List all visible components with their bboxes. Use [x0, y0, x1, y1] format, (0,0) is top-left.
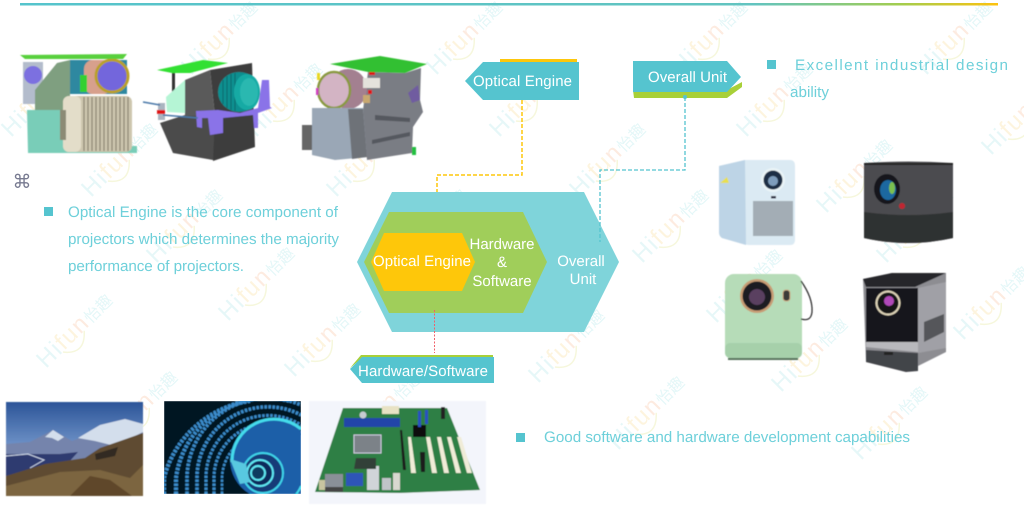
background watermark: Hifun怡趣 [213, 240, 300, 326]
background watermark: Hifun怡趣 [321, 116, 408, 202]
image: mountain landscape [6, 402, 143, 496]
bullet [767, 60, 776, 69]
background watermark: Hifun怡趣 [176, 0, 263, 80]
text block: industrial design: ability [790, 84, 829, 101]
background watermark: Hifun怡趣 [341, 364, 428, 450]
bullet [516, 433, 525, 442]
background watermark: Hifun怡趣 [456, 242, 543, 328]
image: optical engine 1 [20, 54, 137, 153]
background watermark: Hifun怡趣 [386, 182, 473, 268]
bullet [44, 207, 53, 216]
background watermark: Hifun怡趣 [279, 296, 366, 382]
background watermark: Hifun怡趣 [484, 56, 571, 142]
text block: industrial design: Excellent industrial design [795, 57, 1008, 74]
text block: industrial design [767, 57, 1008, 101]
background watermark: Hifun怡趣 [421, 0, 508, 80]
background watermark: Hifun怡趣 [76, 116, 163, 202]
image: optical engine 3 [302, 56, 427, 160]
background watermark: Hifun怡趣 [701, 242, 788, 328]
nested hexagon diagram: Software [472, 273, 532, 290]
label: hardware software [350, 355, 494, 383]
text block: optical engine description: performance of projectors. [68, 258, 244, 275]
label: optical engine: Optical Engine [473, 73, 572, 90]
top gradient bar [20, 3, 998, 6]
background watermark: Hifun怡趣 [871, 182, 958, 268]
image: optical engine 2 [143, 60, 272, 161]
label: hardware software: Hardware/Software [358, 363, 488, 380]
image: black cube projector [863, 273, 946, 372]
background watermark: Hifun怡趣 [666, 0, 753, 80]
hexagon: optical engine [371, 233, 475, 291]
background watermark: Hifun怡趣 [96, 364, 183, 450]
label: overall unit [633, 61, 742, 98]
text block: optical engine description: Optical Engine is the core component of [68, 204, 339, 221]
background watermark: Hifun怡趣 [911, 0, 998, 80]
nested hexagon diagram: Hardware [469, 236, 535, 253]
connector: overall unit dashed line [600, 95, 687, 242]
icon: command symbol: ⌘ [12, 171, 32, 193]
text block: optical engine description: projectors which determines the majority [68, 231, 339, 248]
background watermark: Hifun怡趣 [627, 182, 714, 268]
background watermark: Hifun怡趣 [241, 56, 328, 142]
text block: software and hardware capabilities: Good software and hardware development capabilities [544, 429, 910, 446]
background watermark: Hifun怡趣 [811, 132, 898, 218]
text block: optical engine description [44, 204, 339, 275]
hexagon: overall unit [357, 192, 619, 332]
nested hexagon diagram: Overall [557, 253, 605, 270]
background watermark: Hifun怡趣 [766, 311, 853, 397]
background watermark: Hifun怡趣 [141, 182, 228, 268]
image: motherboard [309, 401, 486, 504]
nested hexagon diagram [357, 192, 619, 332]
background watermark: Hifun怡趣 [603, 369, 690, 455]
background watermark: Hifun怡趣 [846, 379, 933, 465]
image: dark cylindrical projector [864, 162, 953, 243]
background watermark: Hifun怡趣 [31, 287, 118, 373]
image: green projector [725, 274, 812, 360]
label: optical engine [465, 59, 579, 100]
background watermark: Hifun怡趣 [523, 302, 610, 388]
image: white projector [719, 160, 795, 245]
connector: optical engine dashed line [437, 100, 522, 233]
image: binary code tunnel [164, 401, 301, 494]
label: overall unit: Overall Unit [648, 69, 728, 86]
nested hexagon diagram: Optical Engine [373, 253, 471, 270]
nested hexagon diagram: Unit [570, 271, 597, 288]
connector: hardware software dotted line [434, 310, 436, 353]
background watermark: Hifun怡趣 [564, 116, 651, 202]
hexagon: hardware and software [364, 212, 547, 313]
nested hexagon diagram: & [497, 254, 507, 271]
background watermark: Hifun怡趣 [731, 56, 818, 142]
